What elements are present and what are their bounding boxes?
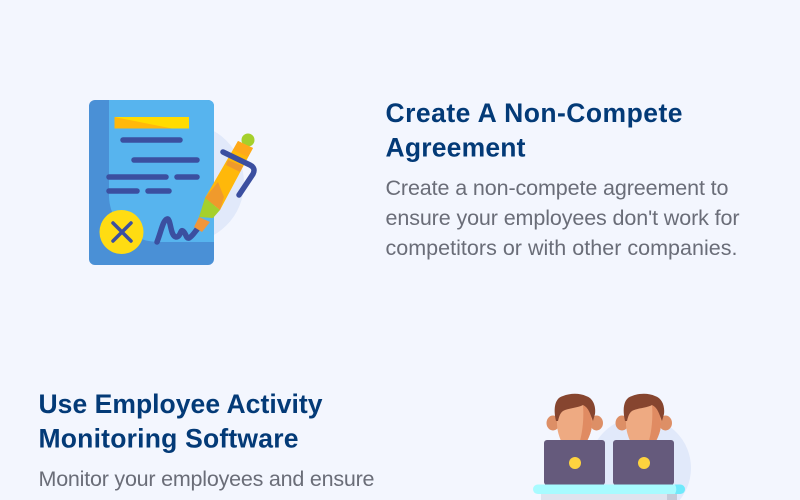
person: left (546, 394, 603, 444)
text block: non-compete description (386, 176, 740, 260)
icon: employees at laptops (533, 394, 691, 500)
laptop: right (613, 440, 674, 485)
laptop: left (544, 440, 605, 485)
text block: non-compete description: ensure your employees don't work for (386, 206, 740, 230)
heading: use employee activity monitoring software: Monitoring Software (38, 424, 298, 454)
text block: non-compete description: competitors or with other companies. (386, 236, 738, 260)
heading: use employee activity monitoring software: Use Employee Activity (38, 389, 323, 419)
heading: use employee activity monitoring software (38, 389, 323, 454)
text block: monitoring description: Monitor your employees and ensure (38, 467, 374, 491)
icon: document with pen (89, 100, 254, 265)
text block: non-compete description: Create a non-compete agreement to (386, 176, 729, 200)
heading: create a non-compete agreement (386, 98, 682, 162)
heading: create a non-compete agreement: Create A Non-Compete (386, 98, 682, 128)
heading: create a non-compete agreement: Agreement (386, 132, 526, 162)
person: right (616, 394, 672, 444)
desk (533, 484, 685, 500)
